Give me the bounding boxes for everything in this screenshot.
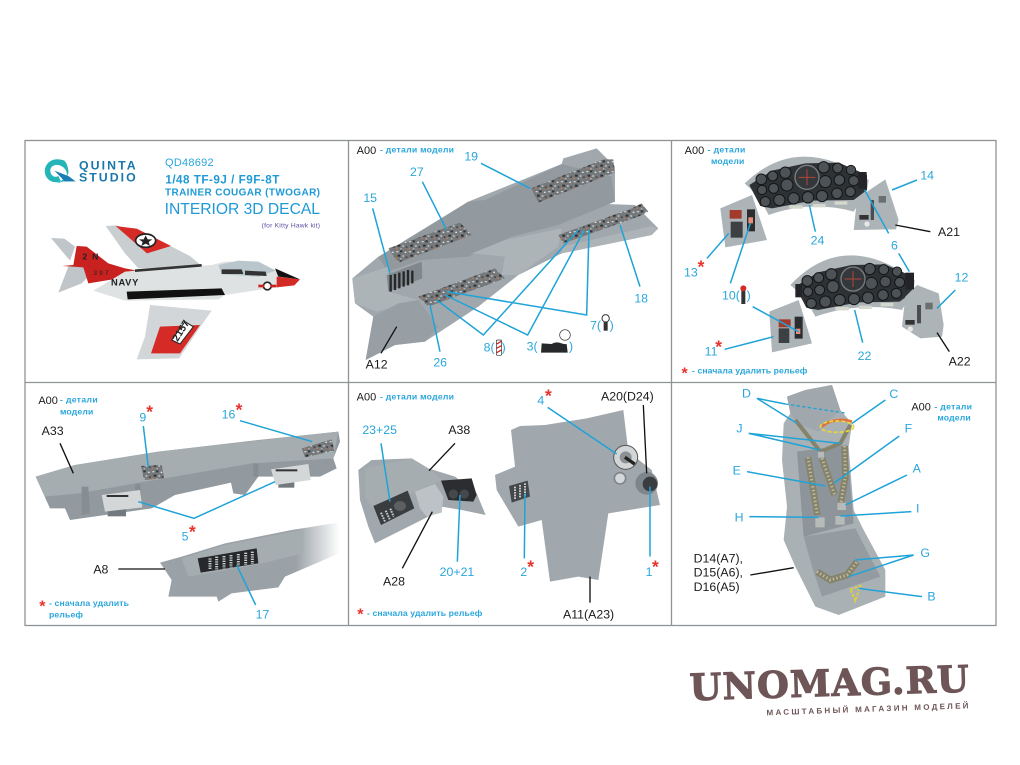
labels: I: [916, 502, 919, 516]
labels: [362, 385, 659, 622]
labels: 9: [139, 410, 146, 424]
labels: 1: [646, 565, 653, 579]
labels: [694, 386, 936, 603]
leader lines: [747, 398, 922, 597]
labels: *: [698, 257, 705, 277]
note: remove relief: [39, 598, 129, 619]
labels: *: [189, 521, 196, 541]
tub part A12: [352, 148, 658, 360]
aircraft illustration: 397: [93, 270, 109, 277]
note: remove relief: - сначала удалить: [49, 598, 129, 608]
decal 20+21: [441, 478, 477, 502]
labels: 14: [920, 168, 934, 182]
model parts note: [911, 401, 972, 423]
model parts note: модели: [711, 156, 744, 166]
labels: 10(: [722, 288, 741, 302]
labels: 24: [811, 234, 825, 248]
labels: A: [913, 461, 922, 475]
labels: A11(A23): [563, 608, 614, 622]
decal 26: [418, 268, 505, 307]
labels: *: [146, 401, 153, 421]
part A38: [358, 458, 486, 543]
labels: C: [889, 387, 898, 401]
labels: D14(A7),: [694, 551, 743, 565]
panel: cockpit tub: [352, 145, 658, 371]
product code: QD48692: [165, 157, 214, 169]
decal 18: [558, 203, 648, 243]
labels: B: [927, 589, 936, 603]
panel: title and aircraft: [45, 157, 320, 359]
note: remove relief: [357, 606, 483, 623]
labels: 5: [182, 529, 189, 543]
seat D14: [782, 385, 885, 615]
labels: 16: [222, 408, 236, 422]
panel: ejection seat: [694, 385, 972, 615]
model parts note: A00: [38, 395, 58, 407]
labels: A12: [366, 357, 388, 371]
labels: A22: [949, 355, 971, 369]
logo: Quinta Studio: STUDIO: [79, 170, 136, 184]
icon: control handle: [541, 330, 570, 353]
labels: *: [236, 399, 243, 419]
decal 9: [141, 465, 164, 480]
model parts note: A00: [685, 145, 704, 157]
labels: 7(: [590, 318, 602, 332]
labels: G: [920, 546, 930, 560]
labels: 26: [433, 355, 447, 369]
shop tagline: МАСШТАБНЫЙ МАГАЗИН МОДЕЛЕЙ: [766, 701, 969, 717]
instrument panel A22: [769, 255, 944, 352]
model parts note: модели: [937, 413, 971, 423]
model parts note: [357, 391, 454, 404]
heading: model: 1/48 TF-9J / F9F-8T: [165, 173, 279, 186]
model parts note: [685, 145, 745, 166]
icon: knob lever: [602, 315, 609, 331]
note: remove relief: - сначала удалить рельеф: [367, 608, 483, 618]
heading: interior decal: INTERIOR 3D DECAL: [165, 201, 320, 218]
labels: *: [527, 557, 534, 577]
note: remove relief: *: [39, 599, 46, 616]
decal 15: [387, 262, 422, 292]
labels: 4: [537, 394, 544, 408]
logo: Quinta Studio: QUINTA: [79, 158, 136, 172]
labels: *: [545, 385, 552, 405]
note: remove relief: *: [357, 606, 364, 623]
decal 5 right: [271, 464, 311, 485]
labels: E: [733, 463, 741, 477]
note: remove relief: рельеф: [49, 609, 83, 619]
logo: Quinta Studio: [45, 158, 136, 184]
decal 23+25: [373, 491, 414, 525]
model parts note: A00: [357, 145, 376, 157]
labels: 15: [363, 191, 377, 205]
model parts note: [38, 395, 98, 416]
labels: 27: [410, 165, 424, 179]
decal 27: [388, 223, 472, 263]
labels: [42, 399, 270, 621]
labels: H: [735, 510, 744, 524]
labels: *: [715, 337, 722, 357]
labels: A8: [93, 562, 109, 576]
icon: striped lever: [496, 340, 502, 355]
panel: side panels and plate: [357, 385, 660, 623]
model parts note: - детали: [934, 401, 972, 411]
labels: 19: [464, 150, 478, 164]
labels: ): [747, 288, 751, 302]
decal B ring: [850, 586, 860, 601]
aircraft illustration: 2 N: [82, 251, 98, 261]
labels: J: [736, 422, 743, 436]
note: kit: (for Kitty Hawk kit): [262, 222, 320, 229]
leader lines: [60, 421, 312, 605]
model parts note: модели: [60, 406, 93, 416]
model parts note: - детали модели: [380, 391, 454, 401]
model parts note: - детали модели: [380, 145, 454, 155]
labels: ): [610, 318, 614, 332]
aircraft illustration: [51, 225, 300, 359]
note: remove relief: *: [682, 366, 689, 383]
part A33: [36, 432, 340, 520]
leader lines: [381, 405, 650, 603]
labels: 12: [955, 271, 969, 285]
aircraft illustration: 2157: [171, 318, 192, 344]
labels: 8(: [484, 340, 496, 354]
labels: 6: [891, 238, 898, 252]
decal C headrest pad: [820, 420, 854, 432]
labels: ): [569, 339, 573, 353]
labels: A38: [448, 423, 470, 437]
panel grid frame: [25, 140, 996, 626]
labels: 17: [256, 607, 270, 621]
plate A11: [495, 410, 660, 582]
labels: 20+21: [440, 565, 474, 579]
labels: F: [905, 422, 913, 436]
panel: side consoles: [36, 395, 343, 621]
heading: trainer: TRAINER COUGAR (TWOGAR): [165, 187, 320, 198]
labels: A20(D24): [601, 390, 654, 404]
labels: 22: [858, 349, 872, 363]
labels: [684, 168, 971, 369]
model parts note: A00: [911, 402, 931, 414]
note: remove relief: [682, 366, 808, 383]
instrument panel A21: [720, 157, 899, 247]
labels: 18: [634, 291, 648, 305]
labels: 23+25: [362, 423, 397, 437]
labels: A33: [42, 424, 64, 438]
model parts note: A00: [357, 392, 376, 404]
labels: D16(A5): [694, 580, 740, 594]
decal 19: [531, 159, 614, 203]
leader lines: [373, 163, 640, 353]
labels: 11: [705, 344, 718, 358]
model parts note: [357, 145, 454, 157]
decal 16: [302, 439, 334, 457]
decal 5 left: [102, 490, 142, 512]
labels: A21: [938, 225, 960, 239]
labels: D: [742, 386, 751, 400]
shop name: UNOMAG.RU: [689, 658, 970, 709]
icon: red knob lever: [740, 285, 746, 304]
labels: D15(A6),: [694, 566, 743, 580]
note: remove relief: - сначала удалить рельеф: [692, 366, 808, 376]
model parts note: - детали: [60, 395, 98, 405]
labels: [363, 150, 648, 371]
part A8: [160, 523, 343, 602]
labels: *: [652, 557, 659, 577]
model parts note: - детали: [708, 145, 745, 155]
labels: 3(: [527, 339, 539, 353]
labels: 2: [520, 565, 527, 579]
panel: instrument panels: [682, 145, 971, 383]
aircraft illustration: NAVY: [111, 278, 139, 288]
straps: [795, 420, 857, 580]
watermark: UNOMAG.RU: [689, 658, 970, 717]
labels: ): [502, 340, 506, 354]
leader lines: [707, 180, 955, 352]
labels: 13: [684, 265, 698, 279]
buckles: [815, 452, 846, 527]
labels: A28: [383, 574, 405, 588]
